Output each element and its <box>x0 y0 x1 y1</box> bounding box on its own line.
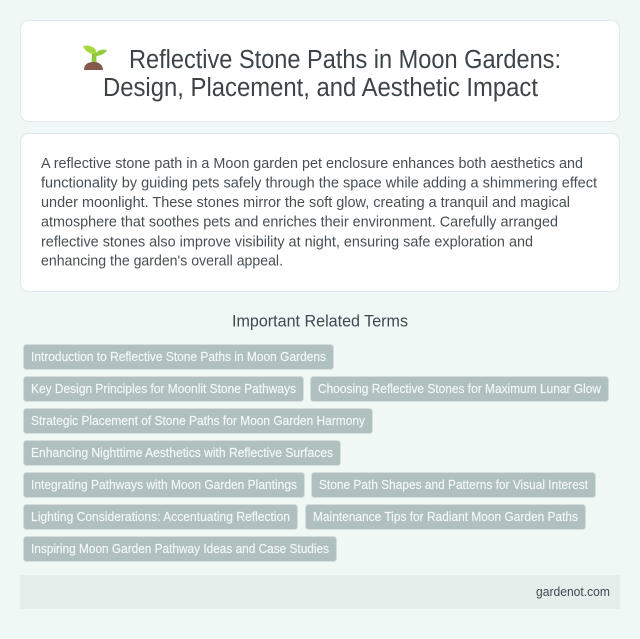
title text: Reflective Stone Paths in Moon Gardens: <box>129 46 561 74</box>
chip: key design: Key Design Principles for Moonlit Stone Pathways <box>31 382 296 396</box>
chip: lighting <box>24 504 298 530</box>
chip: choosing stones <box>310 376 608 402</box>
chip: strategic placement <box>24 408 372 434</box>
chip: maintenance <box>306 504 586 530</box>
chip: key design <box>24 376 304 402</box>
description text: A reflective stone path in a Moon garden pet enclosure enhances both aesthetics and <box>41 156 583 172</box>
chip: nighttime aesthetics <box>24 440 340 466</box>
title panel <box>20 20 620 122</box>
chip: lighting: Lighting Considerations: Accentuating Reflection <box>31 510 290 524</box>
chip: integrating pathways <box>24 472 304 498</box>
chip: inspiring ideas: Inspiring Moon Garden Pathway Ideas and Case Studies <box>31 542 329 556</box>
heading: related terms: Important Related Terms <box>232 312 408 330</box>
chip: shapes and patterns <box>312 472 596 498</box>
description text <box>41 156 598 270</box>
footer <box>20 575 620 609</box>
chip: inspiring ideas <box>24 536 336 562</box>
panel: description <box>20 134 620 292</box>
chip: strategic placement: Strategic Placement of Stone Paths for Moon Garden Harmony <box>31 414 366 428</box>
chip: nighttime aesthetics: Enhancing Nighttime Aesthetics with Reflective Surfaces <box>31 446 333 460</box>
description text: functionality by guiding pets safely through the space while adding a shimmering effect <box>41 176 598 192</box>
chip: choosing stones: Choosing Reflective Stones for Maximum Lunar Glow <box>318 382 602 396</box>
description text: atmosphere that soothes pets and enriches their environment. Carefully arranged <box>41 214 558 230</box>
description text: reflective stones also improve visibility at night, ensuring safe exploration and <box>41 234 533 250</box>
chip: shapes and patterns: Stone Path Shapes and Patterns for Visual Interest <box>319 478 588 492</box>
chip: introduction <box>24 344 334 370</box>
title text: Design, Placement, and Aesthetic Impact <box>103 74 538 102</box>
footer text: gardenot.com <box>536 585 610 599</box>
icon: seedling <box>83 46 107 70</box>
description text: enhancing the garden's overall appeal. <box>41 254 283 270</box>
chip: integrating pathways: Integrating Pathways with Moon Garden Plantings <box>31 478 297 492</box>
title text <box>103 46 561 102</box>
chip: maintenance: Maintenance Tips for Radiant Moon Garden Paths <box>313 510 578 524</box>
chip: introduction: Introduction to Reflective Stone Paths in Moon Gardens <box>31 350 326 364</box>
related terms chips <box>24 344 608 562</box>
description text: under moonlight. These stones mirror the soft glow, creating a tranquil and magical <box>41 195 570 211</box>
